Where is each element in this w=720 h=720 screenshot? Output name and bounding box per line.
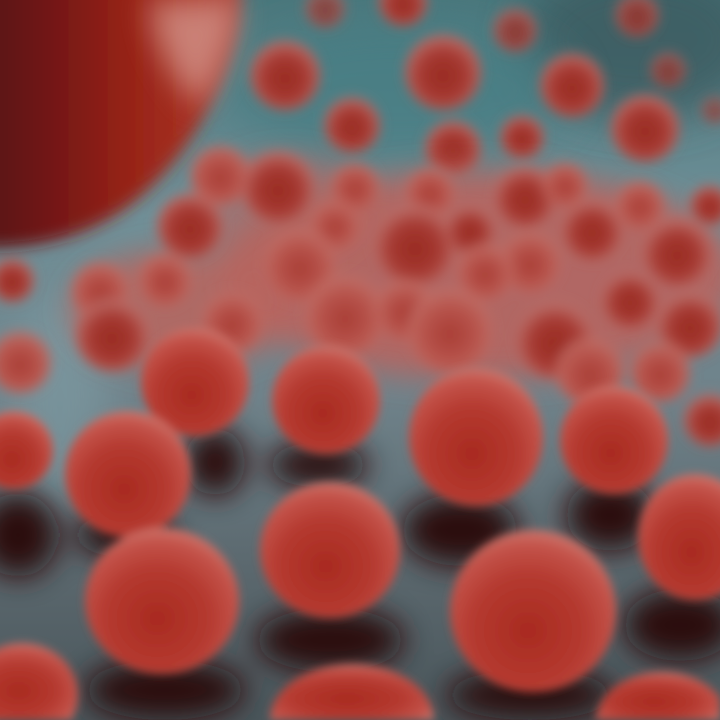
front row of cells xyxy=(0,328,720,720)
highlight on large cell xyxy=(150,0,238,105)
back row of cells xyxy=(250,0,720,176)
middle band haze xyxy=(70,155,720,380)
cell shadows xyxy=(0,428,720,720)
middle cluster of cells xyxy=(0,145,720,446)
large foreground cell xyxy=(0,0,242,248)
